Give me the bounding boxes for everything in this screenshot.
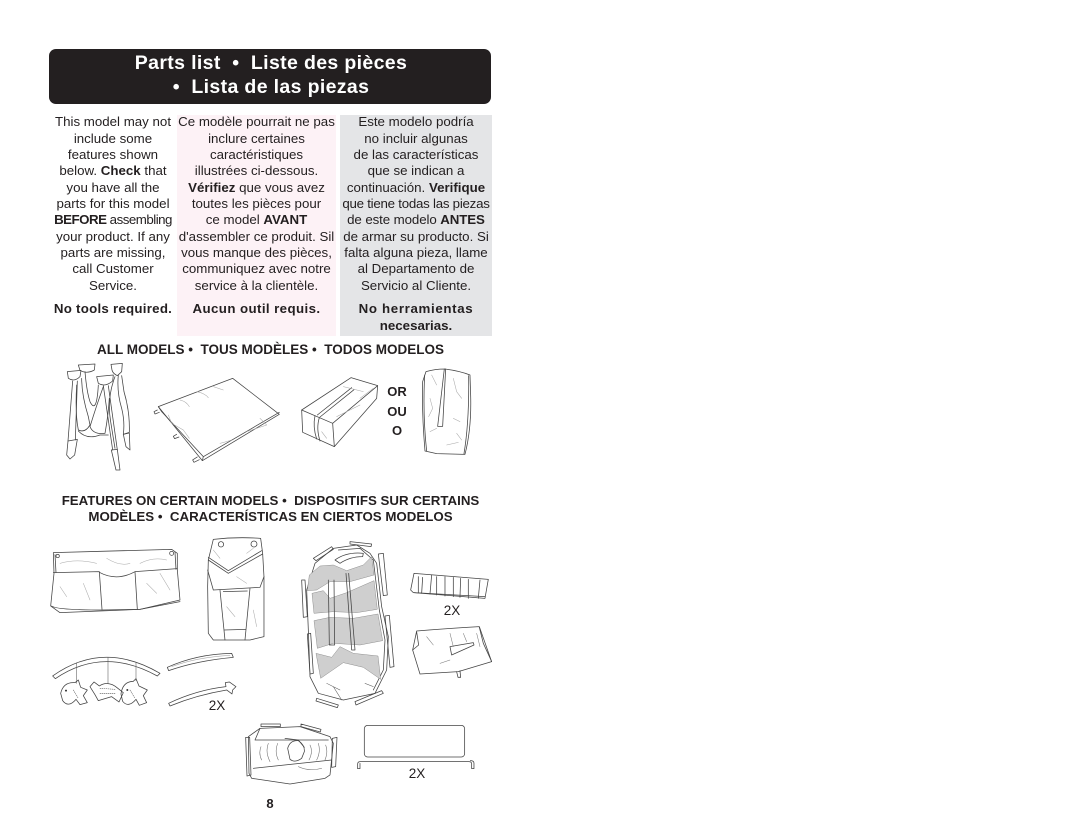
panel: French instructions: inclure certaines (208, 131, 305, 146)
panel: French instructions: Ce modèle pourrait ne pas (178, 114, 335, 129)
panel: Spanish instructions: Servicio al Cliente. (361, 278, 471, 293)
panel: Spanish instructions: Este modelo podría (358, 114, 474, 129)
icon: support bar (358, 761, 474, 769)
icon: canopy arm (167, 653, 233, 671)
page number: 8 (266, 796, 274, 811)
panel: French instructions: d'assembler ce produit. Sil (179, 229, 334, 244)
panel: French instructions: communiquez avec notre (182, 261, 331, 276)
panel: English instructions: No tools required. (54, 301, 172, 316)
icon: bassinet (302, 542, 394, 708)
panel: French instructions: Aucun outil requis. (192, 301, 320, 316)
panel: French instructions: ce model AVANT (206, 212, 307, 227)
panel: French instructions: service à la clientèle. (195, 278, 318, 293)
icon: diaper stacker (208, 538, 264, 640)
panel: Spanish instructions: continuación. Verifique (347, 180, 485, 195)
icon: changing pad bag (413, 627, 492, 677)
heading: or / ou / o: OR (387, 384, 407, 399)
panel: French instructions: Vérifiez que vous avez (188, 180, 325, 195)
panel: Spanish instructions: de armar su producto. Si (343, 229, 489, 244)
panel: English instructions: This model may not (55, 114, 171, 129)
icon: side rail insert (411, 573, 488, 598)
panel: English instructions: you have all the (66, 180, 160, 195)
panel: English instructions: your product. If any (56, 229, 170, 244)
panel: Spanish instructions: que tiene todas las piezas (342, 196, 490, 211)
title banner (49, 49, 491, 104)
panel: Spanish instructions: que se indican a (368, 163, 464, 178)
heading: or / ou / o: OU (387, 404, 407, 418)
label: 2X rail: 2X (444, 603, 460, 618)
icon: carry bag (422, 369, 471, 454)
panel: English instructions: BEFORE assembling (54, 212, 172, 227)
panel: English instructions: Service. (89, 278, 137, 293)
panel: Spanish instructions: necesarias. (380, 318, 452, 333)
panel: English instructions: call Customer (72, 261, 154, 276)
panel: French instructions: toutes les pièces pour (192, 196, 321, 211)
panel: Spanish instructions: no incluir algunas (364, 131, 468, 146)
heading: or / ou / o: O (392, 423, 402, 438)
panel: English instructions: below. Check that (59, 163, 167, 178)
heading: all models: ALL MODELS • TOUS MODÈLES • TODOS MODELOS (97, 342, 444, 357)
panel: English instructions: include some (74, 131, 152, 146)
panel: English instructions: parts are missing, (61, 245, 165, 260)
label: 2X bar: 2X (409, 766, 425, 781)
panel: Spanish instructions: falta alguna pieza, llame (344, 245, 488, 260)
panel: English instructions: parts for this model (56, 196, 170, 211)
panel: French instructions: caractéristiques (210, 147, 303, 162)
panel: French instructions: vous manque des pièces, (181, 245, 332, 260)
icon: folded bassinet pad (246, 724, 337, 784)
icon: toy bar arm (169, 682, 236, 706)
panel: Spanish instructions: de las características (354, 147, 478, 162)
panel: French instructions (177, 115, 336, 336)
icon: wall organizer (51, 549, 180, 613)
panel: English instructions (54, 114, 172, 316)
icon: playard frame (67, 363, 130, 470)
panel: Spanish instructions: al Departamento de (358, 261, 474, 276)
panel: Spanish instructions (340, 115, 492, 336)
panel: Spanish instructions: de este modelo ANTES (347, 212, 485, 227)
icon: storage box (302, 378, 378, 447)
icon: mobile with toys (53, 657, 160, 705)
panel: Spanish instructions: No herramientas (359, 301, 473, 316)
title banner: • Lista de las piezas (173, 76, 369, 98)
label: 2X arm: 2X (209, 698, 225, 713)
panel: English instructions: features shown (68, 147, 158, 162)
heading: or / ou / o (387, 384, 407, 438)
icon: mattress pad (154, 378, 279, 462)
panel: French instructions: illustrées ci-dessous. (195, 163, 318, 178)
title banner: Parts list • Liste des pièces (135, 52, 407, 74)
heading: features on certain models: FEATURES ON CERTAIN MODELS • DISPOSITIFS SUR CERTAINS MODÈLES • CARACTERÍSTICAS EN CIERTOS MODELOS (62, 493, 479, 524)
icon: tray panel (364, 725, 465, 757)
